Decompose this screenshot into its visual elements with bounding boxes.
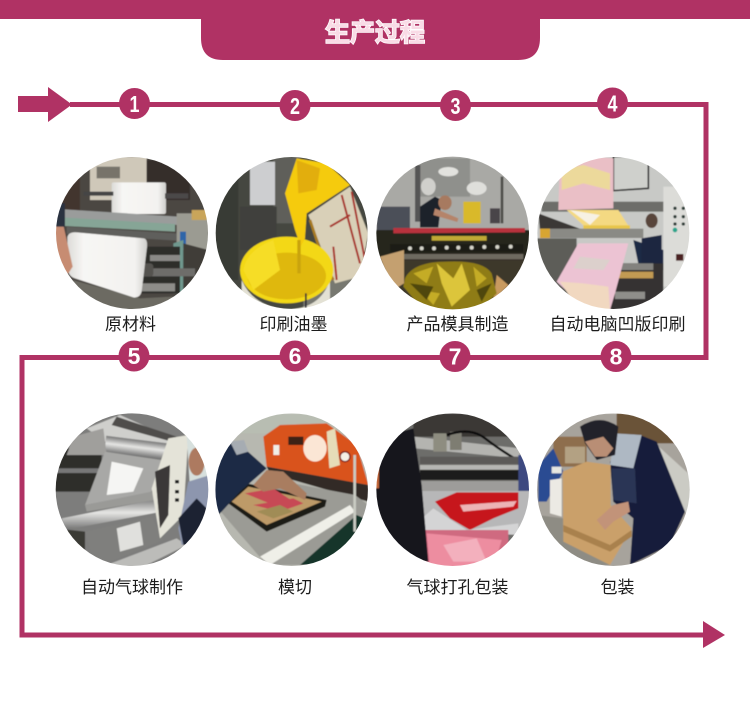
step number 7 — [440, 341, 470, 372]
header banner — [0, 0, 750, 60]
label: 自动气球制作: 自动气球制作 — [81, 578, 183, 597]
step number 3 — [440, 90, 471, 121]
label: 自动电脑凹版印刷: 自动电脑凹版印刷 — [550, 315, 686, 334]
label: 模切: 模切 — [278, 578, 312, 597]
process flow line: top row to second row — [22, 104, 706, 635]
photo 6: die cutting — [215, 413, 370, 567]
step number 7: 7 — [449, 344, 461, 370]
arrow: start — [18, 87, 72, 122]
title: 生产过程 — [325, 19, 425, 47]
label: 印刷油墨: 印刷油墨 — [260, 315, 328, 334]
step number 1: 1 — [130, 92, 139, 118]
step number 2 — [280, 90, 310, 121]
photo 1: raw material rolls — [53, 155, 213, 312]
label: 产品模具制造: 产品模具制造 — [406, 315, 508, 334]
label: 气球打孔包装: 气球打孔包装 — [406, 578, 508, 597]
photo 2: pouring yellow ink — [215, 155, 370, 312]
step number 1 — [119, 88, 150, 119]
photo 4: gravure printing — [537, 155, 692, 312]
label: 原材料: 原材料 — [105, 315, 156, 334]
step number 4 — [597, 88, 628, 118]
step number 5 — [118, 340, 150, 372]
label: 包装: 包装 — [600, 578, 634, 597]
step number 5: 5 — [128, 343, 141, 369]
step number 4: 4 — [608, 91, 618, 117]
photo 5: automatic balloon making — [55, 412, 210, 568]
step number 3: 3 — [451, 94, 460, 120]
arrow: end — [703, 621, 725, 648]
step number 8: 8 — [610, 344, 623, 370]
photo 3: product mould making — [375, 155, 532, 313]
photo 8: packing boxes — [537, 413, 692, 567]
step number 8 — [600, 341, 632, 372]
step number 2: 2 — [290, 94, 300, 120]
photo 7: balloon punching and packing — [375, 413, 532, 568]
step number 6: 6 — [289, 343, 301, 369]
step number 6 — [280, 340, 310, 372]
